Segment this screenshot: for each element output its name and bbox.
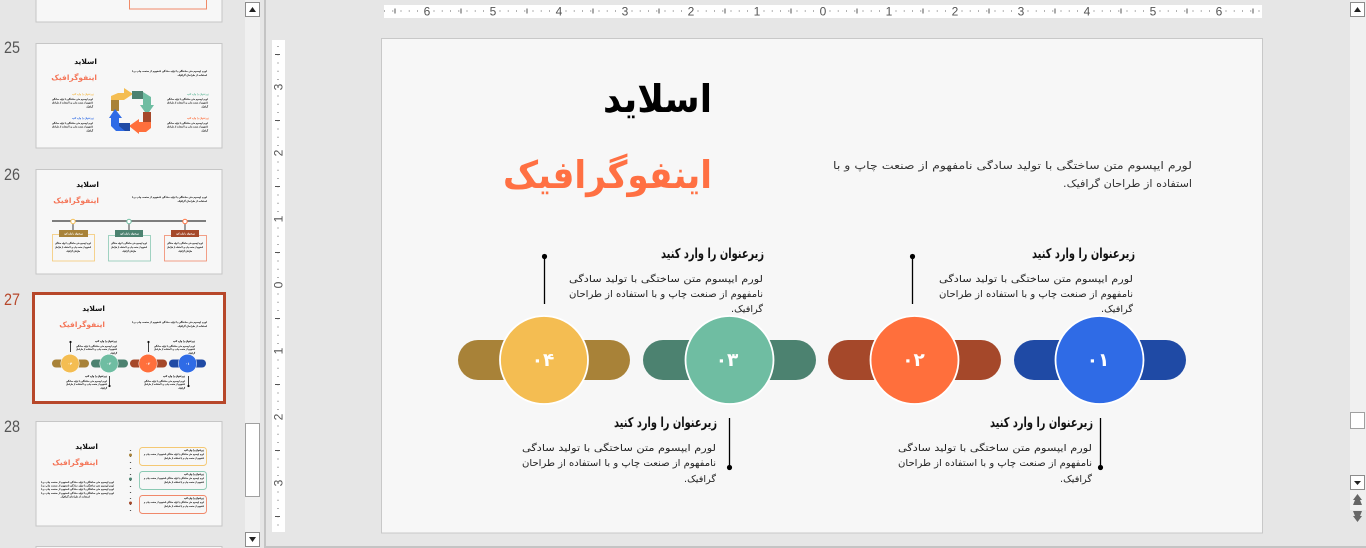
horizontal ruler: 5 [1150, 4, 1157, 18]
thumbnail 26: طراحان گرافیک. [178, 249, 192, 253]
text block 03: زیرعنوان را وارد کنید [614, 415, 717, 431]
horizontal ruler: 0 [820, 4, 827, 18]
horizontal ruler: 2 [952, 4, 959, 18]
horizontal ruler: 3 [1018, 4, 1025, 18]
thumbnail 25: زیرعنوان را وارد کنید [72, 93, 95, 96]
thumbnail 26 [36, 170, 222, 274]
thumbnail 27 active: گرافیک. [110, 351, 118, 355]
subtitle heading: اینفوگرافیک [503, 153, 712, 197]
step 01 blue: ۰۱ [1087, 350, 1109, 371]
thumbnail 25: گرافیک. [86, 128, 94, 132]
thumbnail 25: لورم ایپسوم متن ساختگی با تولید سادگی [167, 97, 208, 101]
thumbnail 28: نامفهوم از صنعت چاپ و با استفاده از طراحان [164, 505, 204, 508]
connector 02 [910, 254, 915, 304]
thumbnail 26: نامفهوم از صنعت چاپ و با استفاده از طراحان [55, 246, 91, 249]
right scrollbar [1350, 0, 1366, 522]
title: اسلاید [603, 77, 712, 121]
thumbnail 27 active: زیرعنوان را وارد کنید [95, 340, 118, 343]
thumbnail 26: زیرعنوان را وارد کنید [64, 232, 84, 236]
thumbnail 27 active: استفاده از طراحان گرافیک. [177, 324, 207, 328]
thumbnail 28: لورم ایپسوم متن ساختگی با تولید سادگی نامفهوم از صنعت چاپ و با [41, 491, 114, 495]
text block 02: لورم ایپسوم متن ساختگی با تولید سادگی [939, 273, 1133, 285]
thumbnail 28: لورم ایپسوم متن ساختگی با تولید سادگی نامفهوم از صنعت چاپ و [143, 452, 204, 456]
thumbnail 25: لورم ایپسوم متن ساختگی با تولید سادگی [52, 121, 93, 125]
thumbnail 27 active: زیرعنوان را وارد کنید [85, 375, 108, 378]
thumbnail 28: اسلاید [75, 442, 98, 451]
thumbnail 27 active [34, 294, 224, 402]
text block 02 [939, 246, 1135, 315]
thumbnail 27 active: لورم ایپسوم متن ساختگی با تولید سادگی [144, 379, 185, 383]
thumbnail 25: لورم ایپسوم متن ساختگی با تولید سادگی نامفهوم از صنعت چاپ و با [132, 69, 207, 73]
thumbnail 26: زیرعنوان را وارد کنید [120, 232, 140, 236]
text block 03: گرافیک. [684, 473, 716, 485]
thumbnail 27 active: نامفهوم از صنعت چاپ و با استفاده از طراحان [144, 383, 185, 386]
thumbnail 26: لورم ایپسوم متن ساختگی با تولید سادگی [167, 241, 203, 245]
thumbnail 28: زیرعنوان را وارد کنید [184, 497, 204, 500]
panel: main slide [382, 38, 1262, 533]
horizontal ruler: 4 [1084, 4, 1091, 18]
thumbnail 26: نامفهوم از صنعت چاپ و با استفاده از طراحان [111, 246, 147, 249]
horizontal ruler: 1 [886, 4, 893, 18]
horizontal ruler: 6 [1216, 4, 1223, 18]
thumbnail 27 active: گرافیک. [178, 386, 186, 390]
intro text [833, 159, 1192, 190]
text block 04: لورم ایپسوم متن ساختگی با تولید سادگی [569, 273, 763, 285]
thumbnail 28: لورم ایپسوم متن ساختگی با تولید سادگی نامفهوم از صنعت چاپ و [143, 500, 204, 504]
text block 04: نامفهوم از صنعت چاپ و با استفاده از طراحان [569, 289, 763, 300]
thumbnail 27 active: ۰۲ [146, 362, 151, 366]
step 03 green [643, 316, 816, 404]
horizontal ruler: 6 [424, 4, 431, 18]
thumbnail 26: طراحان گرافیک. [122, 249, 136, 253]
thumbnail 26: لورم ایپسوم متن ساختگی با تولید سادگی [55, 241, 91, 245]
thumbnail 27 active: اینفوگرافیک [59, 320, 105, 329]
thumbnail number 27 active: 27 [4, 291, 20, 309]
horizontal ruler: 1 [754, 4, 761, 18]
thumbnail 27 active: نامفهوم از صنعت چاپ و با استفاده از طراحان [154, 348, 195, 351]
text block 04: گرافیک. [731, 303, 763, 315]
vertical ruler [272, 40, 286, 532]
thumbnail 24 partial [36, 0, 222, 22]
thumbnail 28 [36, 422, 222, 526]
text block 04: زیرعنوان را وارد کنید [661, 246, 764, 262]
step 01 blue [1014, 316, 1186, 404]
text block 01: گرافیک. [1060, 473, 1092, 485]
thumbnail 25: زیرعنوان را وارد کنید [72, 117, 95, 120]
step 03 green: ۰۳ [716, 350, 739, 371]
thumbnail 27 active: ۰۴ [68, 362, 73, 366]
thumbnail 25: زیرعنوان را وارد کنید [187, 117, 210, 120]
horizontal ruler: 2 [688, 4, 695, 18]
vertical ruler: 1 [272, 347, 286, 354]
text block 01 [898, 415, 1093, 485]
text block 03 [522, 415, 717, 485]
thumbnail 26: زیرعنوان را وارد کنید [176, 232, 196, 236]
thumbnail 28: زیرعنوان را وارد کنید [184, 473, 204, 476]
thumbnail 25 [36, 44, 222, 148]
thumbnail 28: لورم ایپسوم متن ساختگی با تولید سادگی نامفهوم از صنعت چاپ و با [41, 480, 114, 484]
thumbnail number 28: 28 [4, 418, 20, 436]
thumbnail 28: اینفوگرافیک [52, 458, 98, 467]
thumbnail 28: لورم ایپسوم متن ساختگی با تولید سادگی نامفهوم از صنعت چاپ و با [41, 484, 114, 488]
thumbnail 25: گرافیک. [201, 128, 209, 132]
vertical ruler: 1 [272, 215, 286, 222]
intro text: لورم ایپسوم متن ساختگی با تولید سادگی نامفهوم از صنعت چاپ و با [833, 159, 1192, 172]
horizontal ruler: 5 [490, 4, 497, 18]
thumbnail 27 active: ۰۱ [185, 362, 190, 366]
thumbnail 29 partial [36, 546, 222, 548]
thumbnail 28: لورم ایپسوم متن ساختگی با تولید سادگی نامفهوم از صنعت چاپ و [143, 476, 204, 480]
thumbnail 25: اسلاید [74, 57, 97, 66]
thumbnail 26: نامفهوم از صنعت چاپ و با استفاده از طراحان [167, 246, 203, 249]
thumbnail 25: نامفهوم از صنعت چاپ و با استفاده از طراحان [167, 126, 208, 128]
text block 01: نامفهوم از صنعت چاپ و با استفاده از طراحان [898, 458, 1092, 469]
text block 04 [569, 246, 764, 315]
thumbnail 27 active: گرافیک. [188, 351, 196, 355]
text block 02: گرافیک. [1101, 303, 1133, 315]
thumbnail 25: گرافیک. [86, 104, 94, 108]
horizontal ruler: 4 [556, 4, 563, 18]
text block 03: نامفهوم از صنعت چاپ و با استفاده از طراحان [522, 458, 716, 469]
thumbnail 27 active: گرافیک. [100, 386, 108, 390]
thumbnail 27 active: نامفهوم از صنعت چاپ و با استفاده از طراحان [66, 383, 107, 386]
text block 03: لورم ایپسوم متن ساختگی با تولید سادگی [522, 442, 716, 454]
vertical ruler: 2 [272, 413, 286, 420]
thumbnail 25: استفاده از طراحان گرافیک. [177, 73, 207, 77]
thumbnail 25: لورم ایپسوم متن ساختگی با تولید سادگی [167, 121, 208, 125]
connector 01 [1098, 418, 1103, 470]
vertical ruler: 3 [272, 83, 286, 90]
thumbnail 25: لورم ایپسوم متن ساختگی با تولید سادگی [52, 97, 93, 101]
connector 04 [542, 254, 547, 304]
horizontal ruler: 3 [622, 4, 629, 18]
text block 01: زیرعنوان را وارد کنید [990, 415, 1093, 431]
panel: slide thumbnails [4, 0, 224, 548]
text block 02: زیرعنوان را وارد کنید [1032, 246, 1135, 262]
step 04 yellow: ۰۴ [532, 350, 554, 371]
thumbnail 27 active: لورم ایپسوم متن ساختگی با تولید سادگی [66, 379, 107, 383]
thumbnail 26: اینفوگرافیک [53, 196, 99, 205]
thumbnail 27 active: ۰۳ [107, 362, 112, 366]
vertical ruler: 0 [272, 281, 286, 288]
thumbnail 25: زیرعنوان را وارد کنید [187, 93, 210, 96]
thumbnail 25: گرافیک. [201, 104, 209, 108]
thumbnail 25: اینفوگرافیک [51, 73, 97, 82]
text block 02: نامفهوم از صنعت چاپ و با استفاده از طراحان [939, 289, 1133, 300]
thumbnail 26: اسلاید [76, 180, 99, 189]
thumbnail 25: نامفهوم از صنعت چاپ و با استفاده از طراحان [52, 102, 93, 104]
vertical ruler: 3 [272, 479, 286, 486]
thumbnail 28: نامفهوم از صنعت چاپ و با استفاده از طراحان [164, 457, 204, 460]
connector 03 [727, 418, 732, 470]
thumbnail 27 active: لورم ایپسوم متن ساختگی با تولید سادگی [154, 344, 195, 348]
vertical ruler: 2 [272, 149, 286, 156]
thumbnail 26: استفاده از طراحان گرافیک. [177, 199, 207, 203]
thumbnail 27 active: اسلاید [82, 304, 105, 313]
thumbnail 27 active: نامفهوم از صنعت چاپ و با استفاده از طراحان [76, 348, 117, 351]
thumbnail 26: طراحان گرافیک. [66, 249, 80, 253]
text block 01: لورم ایپسوم متن ساختگی با تولید سادگی [898, 442, 1092, 454]
thumbnail 27 active: لورم ایپسوم متن ساختگی با تولید سادگی نامفهوم از صنعت چاپ و با [132, 320, 207, 324]
step 04 yellow [458, 316, 630, 404]
thumbnail number 26: 26 [4, 166, 20, 184]
thumbnail 27 active: زیرعنوان را وارد کنید [173, 340, 196, 343]
thumbnail 26: لورم ایپسوم متن ساختگی با تولید سادگی [111, 241, 147, 245]
thumbnail 27 active: لورم ایپسوم متن ساختگی با تولید سادگی [76, 344, 117, 348]
thumbnail number 25: 25 [4, 39, 20, 57]
thumbnail 28: استفاده از طراحان گرافیک. [60, 494, 90, 498]
thumbnail 26: لورم ایپسوم متن ساختگی با تولید سادگی نامفهوم از صنعت چاپ و با [132, 195, 207, 199]
thumbnail 25: نامفهوم از صنعت چاپ و با استفاده از طراحان [167, 102, 208, 104]
step 02 orange [828, 316, 1001, 404]
step 02 orange: ۰۲ [902, 350, 925, 371]
thumbnail 25: نامفهوم از صنعت چاپ و با استفاده از طراحان [52, 126, 93, 128]
thumbnail 28: زیرعنوان را وارد کنید [184, 449, 204, 452]
horizontal ruler [384, 4, 1262, 18]
thumbnail 28: نامفهوم از صنعت چاپ و با استفاده از طراحان [164, 481, 204, 484]
thumbnail 28: لورم ایپسوم متن ساختگی با تولید سادگی نامفهوم از صنعت چاپ و با [41, 487, 114, 491]
intro text: استفاده از طراحان گرافیک. [1063, 177, 1192, 190]
thumbnail 27 active: زیرعنوان را وارد کنید [163, 375, 186, 378]
